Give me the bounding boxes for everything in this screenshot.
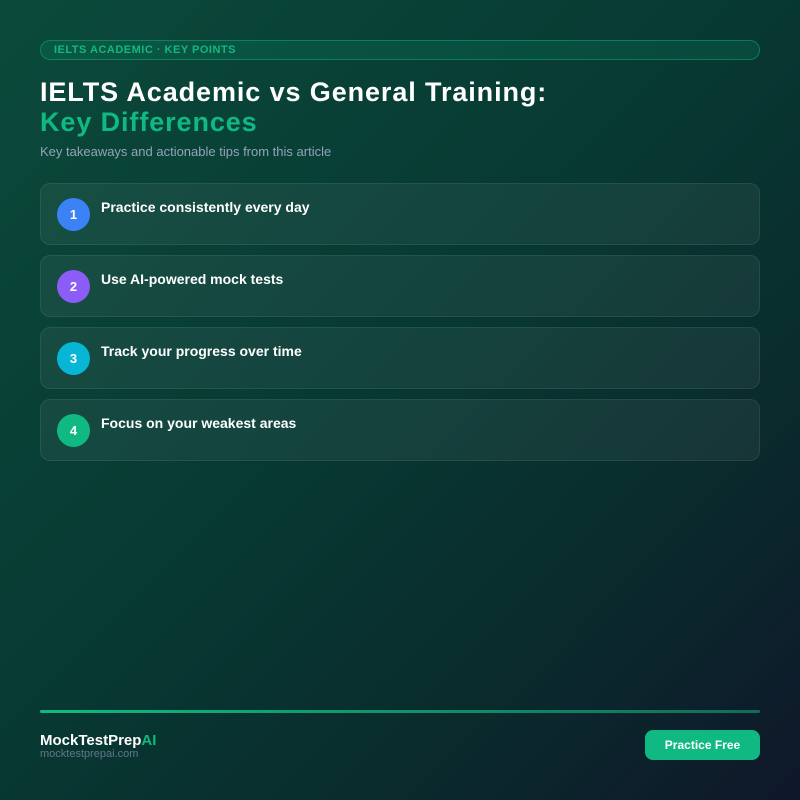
subtitle: Key takeaways and actionable tips from this article bbox=[40, 144, 331, 159]
card 1: 1 bbox=[70, 207, 77, 222]
badge: IELTS ACADEMIC · KEY POINTS bbox=[54, 44, 236, 56]
brand: MockTestPrepAI bbox=[40, 732, 156, 749]
title: Key Differences bbox=[40, 107, 258, 137]
button: Practice Free bbox=[665, 738, 740, 752]
card 4: 4 bbox=[70, 423, 77, 438]
title: IELTS Academic vs General Training: bbox=[40, 77, 547, 107]
card 4 bbox=[40, 399, 760, 461]
card 2: 2 bbox=[70, 279, 77, 294]
title bbox=[40, 77, 547, 137]
card 1: Practice consistently every day bbox=[101, 199, 310, 215]
card 3: 3 bbox=[70, 351, 77, 366]
badge bbox=[40, 40, 760, 60]
card 2: Use AI-powered mock tests bbox=[101, 271, 283, 287]
footer line bbox=[40, 710, 760, 713]
card 2 bbox=[40, 255, 760, 317]
url: mocktestprepai.com bbox=[40, 748, 138, 760]
card 1 bbox=[40, 183, 760, 245]
card 3 bbox=[40, 327, 760, 389]
card 3: Track your progress over time bbox=[101, 343, 302, 359]
button bbox=[645, 730, 760, 760]
card 4: Focus on your weakest areas bbox=[101, 415, 296, 431]
